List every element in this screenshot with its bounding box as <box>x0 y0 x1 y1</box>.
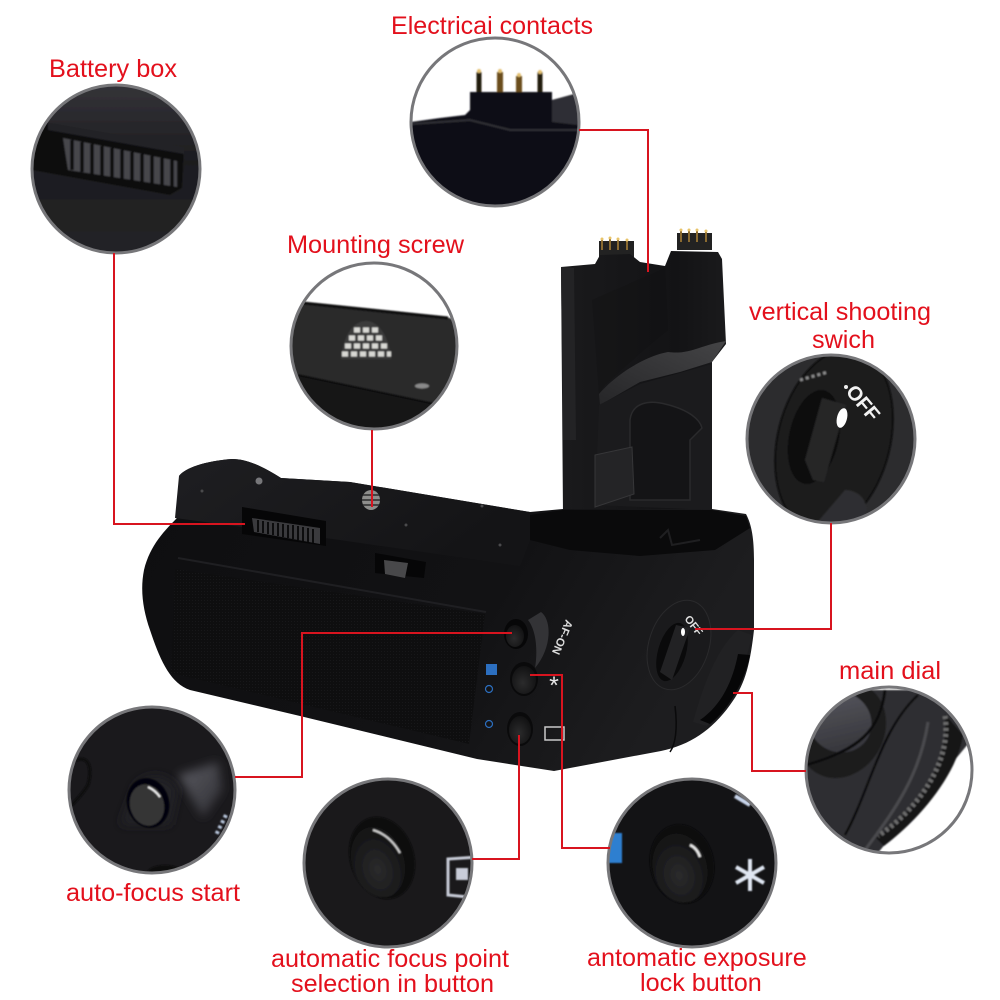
connector: exposure lock <box>530 675 610 848</box>
connector: mounting screw <box>371 430 373 507</box>
tower socket <box>530 510 750 556</box>
dial wheel on top <box>242 507 326 546</box>
panel: auto-focus start detail <box>66 705 238 881</box>
grip tower <box>561 228 726 515</box>
label: automatic exposure lock: antomatic exposure <box>587 944 807 972</box>
label: automatic focus point selection: automatic focus point <box>271 945 509 973</box>
blue focus icons <box>486 664 497 728</box>
connector: vertical switch <box>695 523 831 629</box>
panel: vertical shooting switch detail <box>746 354 916 524</box>
connector: battery box <box>114 253 245 524</box>
lock slider <box>375 553 426 578</box>
label: battery box: Battery box <box>49 55 177 83</box>
small top screw <box>256 478 262 484</box>
label: automatic focus point selection: selection in button <box>291 970 494 998</box>
panel: electrical contacts detail <box>410 38 580 210</box>
connector: focus point selection <box>472 735 519 859</box>
label: mounting screw: Mounting screw <box>287 231 465 259</box>
button cluster <box>486 612 574 746</box>
label: vertical shooting switch: swich <box>812 326 875 354</box>
label: automatic exposure lock: lock button <box>640 969 762 997</box>
vertical switch knob <box>636 592 722 698</box>
focus point icon <box>545 727 564 740</box>
panel: main dial detail <box>804 686 974 854</box>
vertical switch knob: OFF <box>682 613 705 638</box>
label: vertical shooting switch: vertical shooting <box>749 298 931 326</box>
panel: exposure lock button detail <box>606 777 778 949</box>
top face <box>175 459 530 566</box>
label: electrical contacts: Electricai contacts <box>391 12 593 40</box>
product: battery grip <box>142 228 754 771</box>
mounting screw on top <box>362 490 380 510</box>
panel: battery box detail <box>30 85 202 255</box>
small dots on top face <box>200 490 502 546</box>
main dial on body <box>670 630 752 752</box>
tripod screw <box>341 321 391 359</box>
textured side panel <box>171 569 485 744</box>
connector: auto-focus start <box>235 633 512 777</box>
connector: main dial <box>733 693 806 771</box>
label: main dial: main dial <box>839 657 941 685</box>
grip body <box>142 459 754 771</box>
label: auto-focus start: auto-focus start <box>66 879 240 907</box>
connector: electrical contacts <box>579 130 648 272</box>
star marking <box>736 859 764 891</box>
panel: mounting screw detail <box>290 262 460 432</box>
panel: focus point button detail <box>302 777 478 949</box>
star marking: * <box>549 672 559 700</box>
AF-ON marking: AF-ON <box>549 618 574 656</box>
panel: vertical shooting switch detail: OFF <box>841 381 884 426</box>
